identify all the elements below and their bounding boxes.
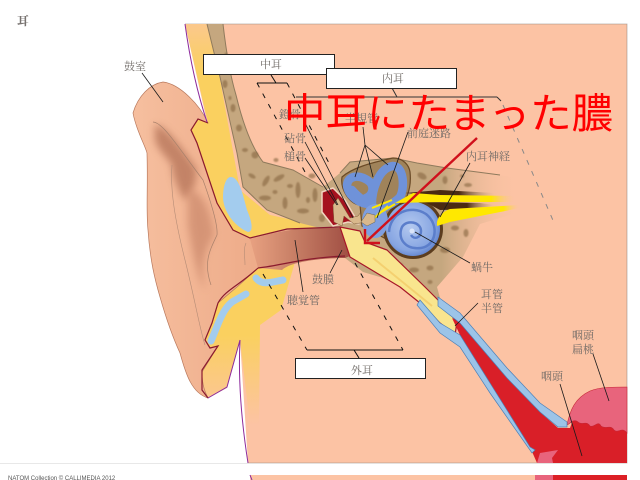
- label: 耳管半管: 半管: [481, 301, 503, 315]
- box: 外耳: [296, 358, 426, 378]
- label: 耳管半管: 耳管: [481, 287, 503, 301]
- semicircular canals: [347, 166, 403, 214]
- fat blue patches: [211, 177, 283, 341]
- ossicles: [333, 198, 372, 226]
- label: 聴覚管: 聴覚管: [287, 293, 320, 307]
- ossicle stapes: [361, 213, 375, 226]
- label: 半規管: 半規管: [345, 111, 378, 125]
- nerve bundle: [395, 190, 520, 226]
- eustachian tube blue walls: [417, 297, 567, 453]
- soft palate: [537, 450, 558, 463]
- label: 咽頭: 咽頭: [541, 370, 564, 383]
- label: 蝸牛: 蝸牛: [471, 260, 493, 274]
- title: 耳: [17, 13, 29, 28]
- bone texture: [222, 52, 472, 284]
- label: 鐙骨: 鐙骨: [279, 108, 301, 121]
- tube pus and lining: [340, 227, 457, 335]
- bottom strip of next page: [250, 475, 627, 480]
- leader lines: [142, 73, 609, 456]
- lower fat layer: [202, 262, 295, 425]
- head skin background: [185, 24, 627, 463]
- inner ear bony capsule: [383, 199, 443, 259]
- tonsil: [567, 387, 627, 433]
- bone: temporal upper: [207, 24, 520, 300]
- page separator: [0, 463, 248, 464]
- callout text: 中耳にたまった膿: [284, 90, 613, 137]
- label: 前庭迷路: 前庭迷路: [407, 126, 451, 140]
- label: 砧骨: 砧骨: [284, 131, 306, 145]
- upper fat layer: [185, 24, 330, 238]
- callout arrow: [365, 138, 477, 243]
- eustachian tube and pharynx red: [452, 318, 627, 463]
- ear canal: [250, 228, 350, 270]
- label: 鼓膜: 鼓膜: [312, 272, 334, 286]
- vestibule: [362, 204, 388, 238]
- outer ear: [133, 82, 345, 398]
- box: 内耳: [326, 68, 456, 88]
- vestibule nerve flecks: [372, 200, 395, 220]
- bracket: outer ear: [263, 263, 403, 358]
- frame lines: [185, 24, 627, 463]
- label: 槌骨: 槌骨: [284, 149, 306, 163]
- label: 内耳神経: 内耳神経: [466, 149, 510, 163]
- box: 中耳: 中耳: [260, 57, 282, 71]
- label: 耳管半管: [481, 287, 503, 315]
- semicircular canal capsule: [342, 158, 410, 240]
- bracket: middle ear: [257, 75, 330, 172]
- purple skin edge: [185, 24, 252, 480]
- canal wall lines: [191, 119, 340, 398]
- middle ear cavity: [322, 188, 372, 226]
- label: 咽頭扁桃: [572, 329, 595, 356]
- label: 咽頭扁桃: 咽頭: [572, 329, 595, 342]
- cochlea: [386, 202, 440, 256]
- box: 内耳: 内耳: [382, 71, 404, 85]
- box: 中耳: [204, 54, 334, 74]
- label: 鼓室: 鼓室: [124, 59, 146, 73]
- bracket: inner ear: [296, 88, 555, 225]
- label: 咽頭扁桃: 扁桃: [572, 342, 594, 356]
- concha shading: [155, 125, 196, 200]
- box: 外耳: 外耳: [351, 363, 373, 377]
